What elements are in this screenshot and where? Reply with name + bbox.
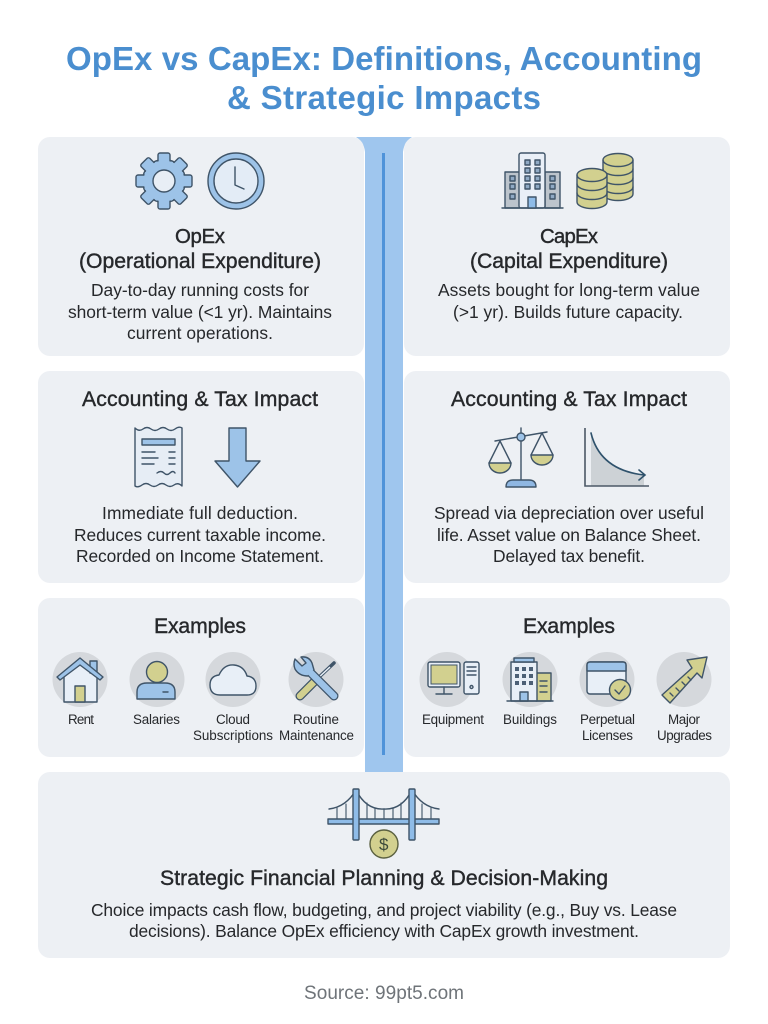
text: strategic description: decisions). Balance OpEx efficiency with CapEx growth investment. xyxy=(129,921,639,941)
text: strategic description xyxy=(91,900,677,941)
example: routine maintenance: Routine xyxy=(293,712,339,727)
heading: OpEx: (Operational Expenditure) xyxy=(79,250,321,273)
text: OpEx tax description: Reduces current taxable income. xyxy=(74,525,326,545)
text: strategic description: Choice impacts cash flow, budgeting, and project viability (e.g., Buy vs. Lease xyxy=(91,900,677,920)
heading: OpEx: OpEx xyxy=(175,226,225,248)
icon: gear xyxy=(136,153,192,209)
panel: OpEx examples xyxy=(38,598,364,757)
title: & Strategic Impacts xyxy=(227,79,541,116)
example: perpetual licenses xyxy=(580,652,635,743)
text: CapEx tax description: Spread via depreciation over useful xyxy=(434,503,704,523)
text: OpEx description xyxy=(68,280,332,343)
heading: CapEx: (Capital Expenditure) xyxy=(470,250,668,273)
icon: office building xyxy=(502,153,563,208)
example: equipment xyxy=(420,652,484,727)
heading: OpEx xyxy=(79,226,321,273)
text: OpEx description: Day-to-day running costs for xyxy=(91,280,309,300)
example: perpetual licenses: Licenses xyxy=(582,728,633,743)
icon: bridge with dollar coin xyxy=(328,789,439,858)
example: major upgrades: Upgrades xyxy=(657,728,712,743)
heading: strategic financial planning: Strategic Financial Planning & Decision-Making xyxy=(160,867,608,890)
panel: CapEx examples xyxy=(404,598,730,757)
text: CapEx tax description: life. Asset value on Balance Sheet. xyxy=(437,525,701,545)
example: salaries xyxy=(130,652,184,727)
panel: OpEx accounting and tax xyxy=(38,371,364,583)
example: salaries: Salaries xyxy=(133,712,180,727)
heading: CapEx xyxy=(470,226,668,273)
example: cloud subscriptions xyxy=(193,652,273,743)
panel: OpEx definition xyxy=(38,137,364,356)
icon: balance scales xyxy=(489,428,553,487)
source note: Source: 99pt5.com xyxy=(304,983,464,1004)
icon: down arrow xyxy=(215,428,260,487)
example: rent: Rent xyxy=(68,712,94,727)
central divider column xyxy=(356,137,412,772)
example: routine maintenance xyxy=(279,652,354,743)
example: cloud subscriptions: Cloud xyxy=(216,712,250,727)
heading: accounting and tax impact: Accounting & Tax Impact xyxy=(451,388,687,411)
panel: CapEx definition xyxy=(404,137,730,356)
title xyxy=(66,40,702,116)
text: CapEx description: Assets bought for long-term value xyxy=(438,280,700,300)
example: major upgrades xyxy=(656,652,712,743)
text: CapEx tax description xyxy=(434,503,704,566)
example: perpetual licenses: Perpetual xyxy=(580,712,635,727)
text: OpEx description: short-term value (<1 yr). Maintains xyxy=(68,302,332,322)
example: buildings xyxy=(502,652,558,727)
text: CapEx tax description: Delayed tax benefit. xyxy=(493,546,645,566)
panel: strategic planning xyxy=(38,772,730,958)
icon: clock xyxy=(208,153,264,209)
example: routine maintenance: Maintenance xyxy=(279,728,354,743)
heading: CapEx: CapEx xyxy=(540,226,598,248)
text: OpEx tax description: Recorded on Income Statement. xyxy=(76,546,324,566)
icon: coin stacks xyxy=(577,154,633,208)
heading: examples: Examples xyxy=(523,615,615,638)
icon: depreciation curve xyxy=(585,428,649,486)
icon: bridge with dollar coin: $ xyxy=(379,835,389,854)
example: major upgrades: Major xyxy=(668,712,701,727)
icon: receipt xyxy=(135,427,182,487)
heading: accounting and tax impact: Accounting & Tax Impact xyxy=(82,388,318,411)
panel: CapEx accounting and tax xyxy=(404,371,730,583)
text: OpEx tax description: Immediate full deduction. xyxy=(102,503,298,523)
example: cloud subscriptions: Subscriptions xyxy=(193,728,273,743)
text: CapEx description: (>1 yr). Builds future capacity. xyxy=(453,302,683,322)
text: OpEx description: current operations. xyxy=(127,323,273,343)
example: buildings: Buildings xyxy=(503,712,557,727)
heading: examples: Examples xyxy=(154,615,246,638)
title: OpEx vs CapEx: Definitions, Accounting xyxy=(66,40,702,77)
example: rent xyxy=(52,652,108,727)
text: CapEx description xyxy=(438,280,700,322)
text: OpEx tax description xyxy=(74,503,326,566)
example: equipment: Equipment xyxy=(422,712,484,727)
